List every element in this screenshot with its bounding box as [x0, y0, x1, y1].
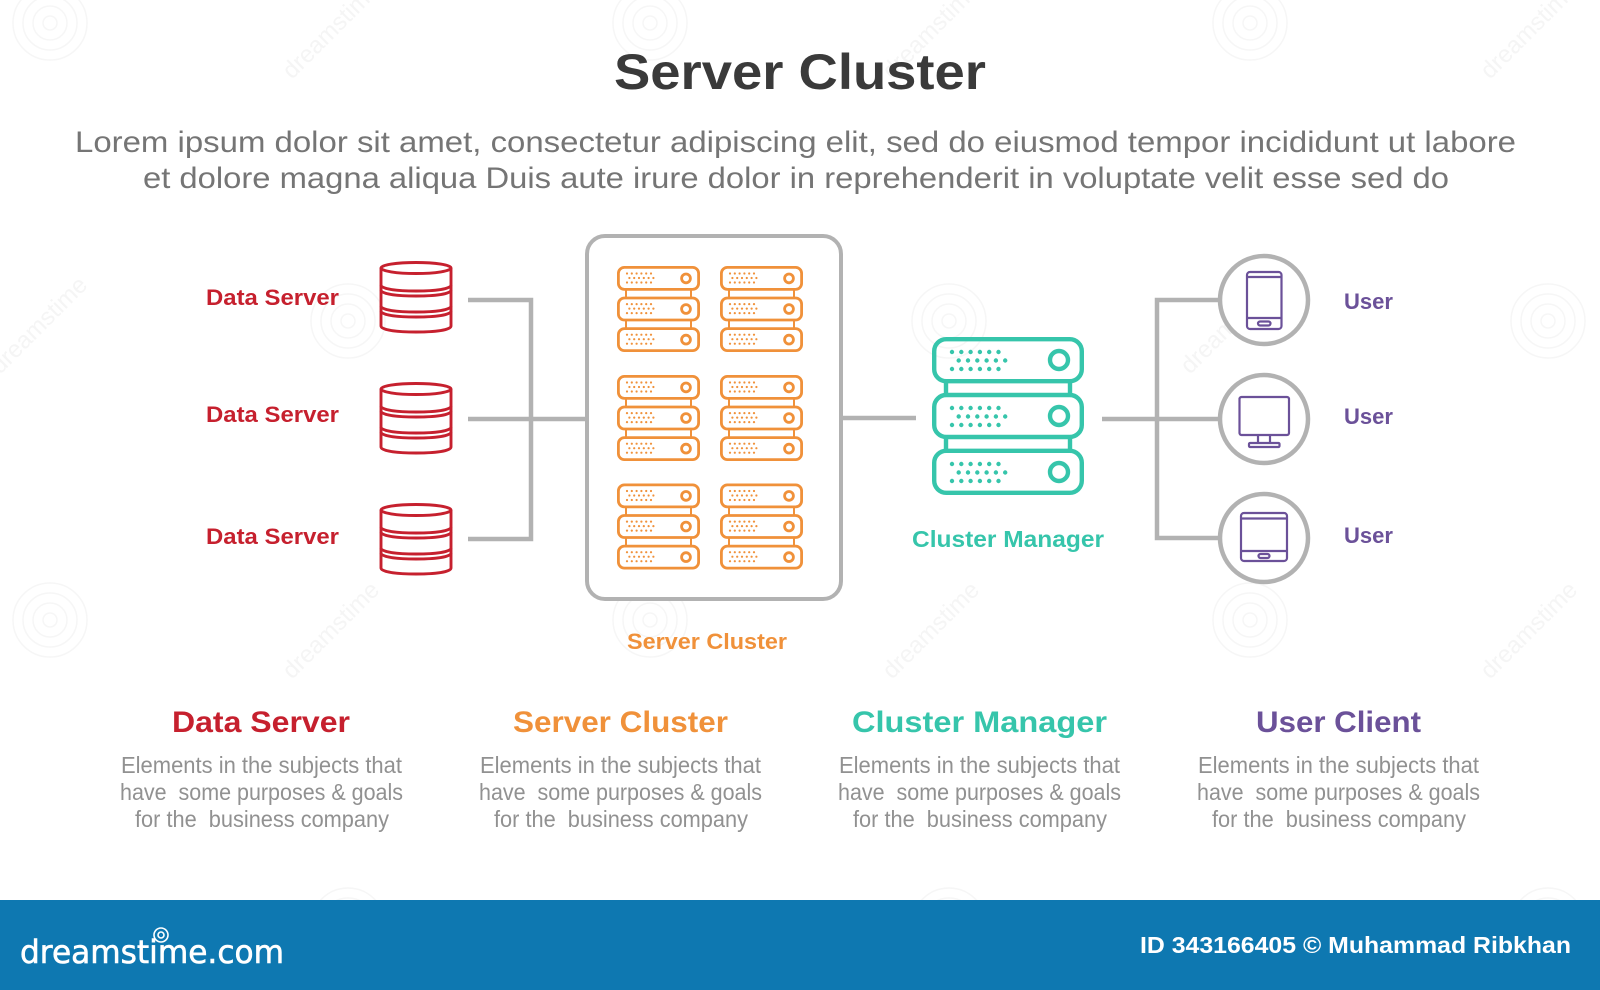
watermark pattern: dreamstime [1475, 576, 1583, 684]
column: cluster manager [838, 706, 1121, 832]
subtitle: et dolore magna aliqua Duis aute irure dolor in reprehenderit in voluptate velit esse sed do [143, 162, 1449, 195]
icon: spiral [154, 928, 168, 942]
description: for the business company [853, 806, 1107, 832]
connector: manager to users [1102, 300, 1220, 538]
column: user client [1197, 706, 1480, 832]
watermark pattern: dreamstime [1175, 271, 1283, 379]
icon: desktop monitor [1240, 397, 1289, 447]
label: user 1: User [1344, 289, 1393, 314]
user: monitor [1220, 375, 1308, 463]
icon: database 2 [381, 384, 451, 453]
description [120, 752, 403, 832]
description [479, 752, 762, 832]
label: user 2: User [1344, 404, 1393, 429]
column: data server [120, 706, 403, 832]
footer logo: dreamstime.com [20, 933, 284, 971]
panel: server cluster [587, 236, 841, 599]
description: have some purposes & goals [1197, 779, 1480, 805]
heading: Data Server [172, 706, 350, 739]
label: data server 1: Data Server [206, 285, 339, 310]
icon: rack top right [721, 267, 802, 351]
icon: rack bottom left [618, 485, 699, 568]
watermark pattern: dreamstime [277, 576, 385, 684]
cluster frame [587, 236, 841, 599]
title: Server Cluster [614, 44, 986, 100]
footer band [0, 900, 1600, 990]
description: for the business company [1212, 806, 1466, 832]
icon: rack bottom right [721, 485, 802, 568]
description: for the business company [494, 806, 748, 832]
footer credit: ID 343166405 © Muhammad Ribkhan [1140, 932, 1571, 958]
icon: rack middle left [618, 376, 699, 460]
description: for the business company [135, 806, 389, 832]
watermark pattern: dreamstime [877, 576, 985, 684]
icon: tablet [1241, 513, 1287, 561]
description: Elements in the subjects that [121, 752, 403, 778]
description: Elements in the subjects that [480, 752, 762, 778]
icon: database 1 [381, 262, 451, 332]
icon: database 3 [381, 504, 451, 574]
label: cluster manager: Cluster Manager [912, 526, 1104, 552]
description [838, 752, 1121, 832]
user: tablet [1220, 494, 1308, 582]
label: data server 3: Data Server [206, 524, 339, 549]
label: server cluster: Server Cluster [627, 629, 787, 654]
heading: Cluster Manager [852, 706, 1107, 739]
description: Elements in the subjects that [1198, 752, 1480, 778]
device circle [1220, 375, 1308, 463]
group: data servers [206, 262, 451, 574]
description: have some purposes & goals [838, 779, 1121, 805]
subtitle [75, 126, 1516, 195]
column: server cluster [479, 706, 762, 832]
watermark pattern: dreamstime [580, 271, 688, 379]
connector: data servers to cluster [468, 300, 587, 539]
description: have some purposes & goals [120, 779, 403, 805]
user: phone [1220, 256, 1308, 344]
icon: cluster manager server [934, 339, 1082, 493]
heading: Server Cluster [513, 706, 728, 739]
connector: cluster to manager [843, 416, 916, 420]
icon: rack middle right [721, 376, 802, 460]
description: Elements in the subjects that [839, 752, 1121, 778]
label: data server 2: Data Server [206, 402, 339, 427]
device circle [1220, 494, 1308, 582]
subtitle: Lorem ipsum dolor sit amet, consectetur adipiscing elit, sed do eiusmod tempor incididunt ut labore [75, 126, 1516, 159]
icon: smartphone [1247, 272, 1282, 329]
icon: rack top left [618, 267, 699, 351]
heading: User Client [1256, 706, 1421, 739]
device circle [1220, 256, 1308, 344]
description: have some purposes & goals [479, 779, 762, 805]
label: user 3: User [1344, 523, 1393, 548]
description [1197, 752, 1480, 832]
